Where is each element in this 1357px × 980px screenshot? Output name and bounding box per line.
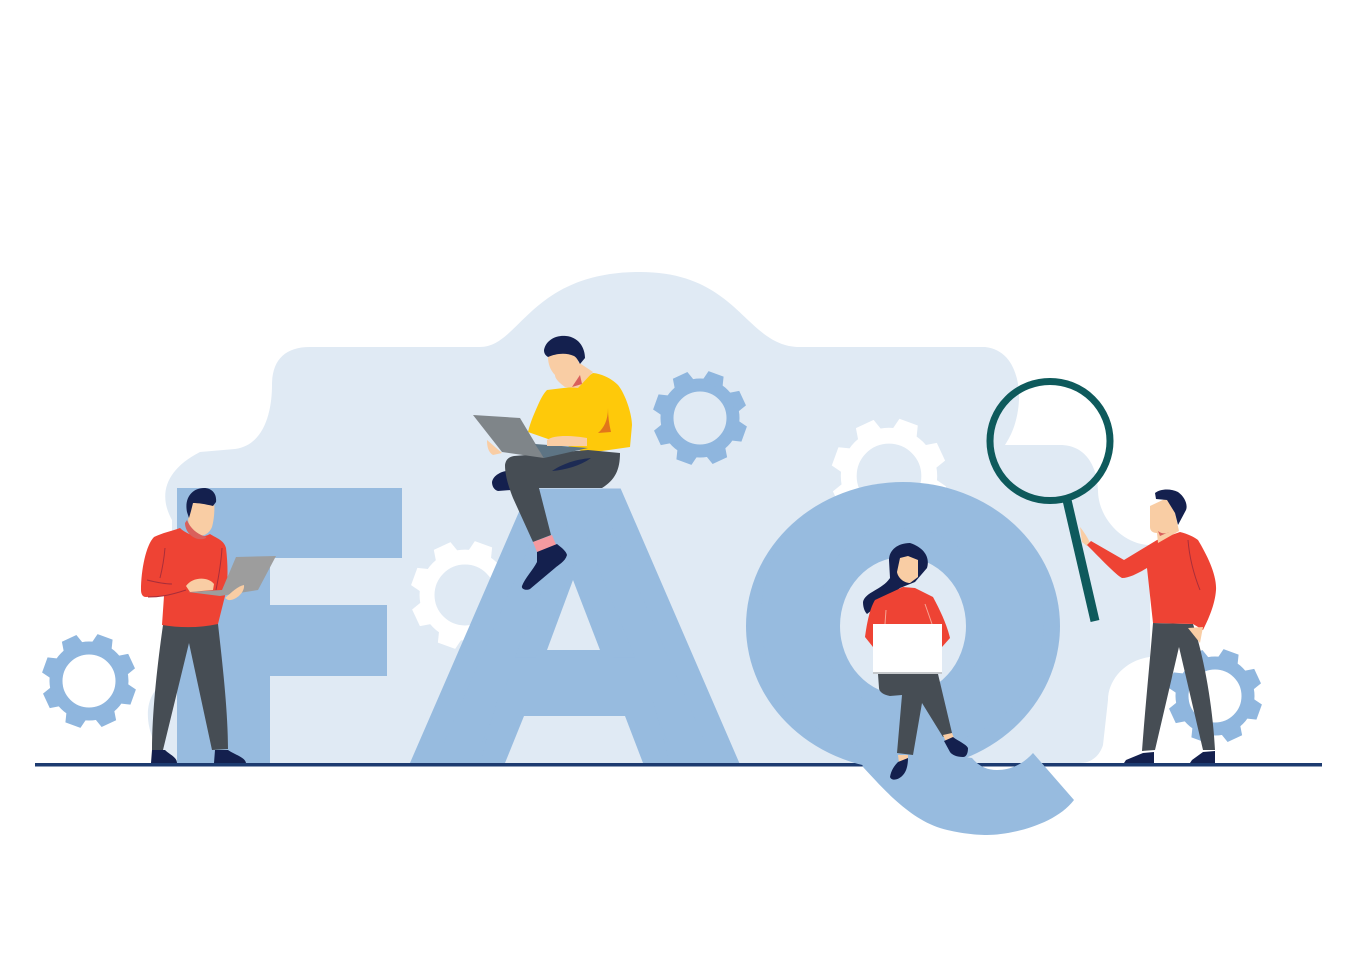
laptop <box>188 556 276 596</box>
face and neck <box>188 500 214 536</box>
shoes <box>1124 751 1215 763</box>
neck and face <box>548 350 593 388</box>
gear: white behind Q <box>831 418 947 534</box>
back shoe <box>492 471 511 491</box>
red sweater <box>865 587 950 647</box>
shoe <box>522 544 567 590</box>
face <box>897 556 918 583</box>
trousers <box>1142 623 1215 751</box>
hands <box>487 436 587 455</box>
gear: far left blue <box>41 633 137 729</box>
background blob <box>148 272 1150 763</box>
gear: right blue <box>1167 648 1263 744</box>
hair <box>544 336 585 364</box>
shoes <box>151 750 246 763</box>
ground line <box>35 763 1322 766</box>
gear: top centre blue <box>652 370 748 466</box>
face and neck <box>1150 498 1179 543</box>
red sweater <box>141 528 228 627</box>
magnifying glass <box>990 382 1110 621</box>
hands <box>186 579 244 600</box>
hair <box>186 488 216 518</box>
sock <box>533 535 557 552</box>
white laptop <box>873 624 942 672</box>
person: man in yellow sitting on A <box>473 336 632 590</box>
person: woman sitting in Q <box>863 543 968 780</box>
hair <box>863 543 928 614</box>
gear: white behind A <box>410 540 520 650</box>
letter Q: Q <box>745 411 1061 824</box>
laptop <box>473 415 544 458</box>
hair <box>1155 489 1187 525</box>
letter A: A <box>416 419 734 832</box>
red sweater <box>1087 532 1216 630</box>
trousers <box>152 624 228 750</box>
feet <box>898 733 954 763</box>
yellow sweater <box>528 373 632 453</box>
letter F: F <box>162 419 393 832</box>
person: man holding magnifier <box>1080 489 1216 763</box>
person: man standing with laptop <box>141 488 276 763</box>
hand on handle <box>1080 527 1090 546</box>
hand in pocket <box>1188 627 1203 643</box>
dark trousers <box>505 450 620 542</box>
trousers <box>878 674 952 755</box>
